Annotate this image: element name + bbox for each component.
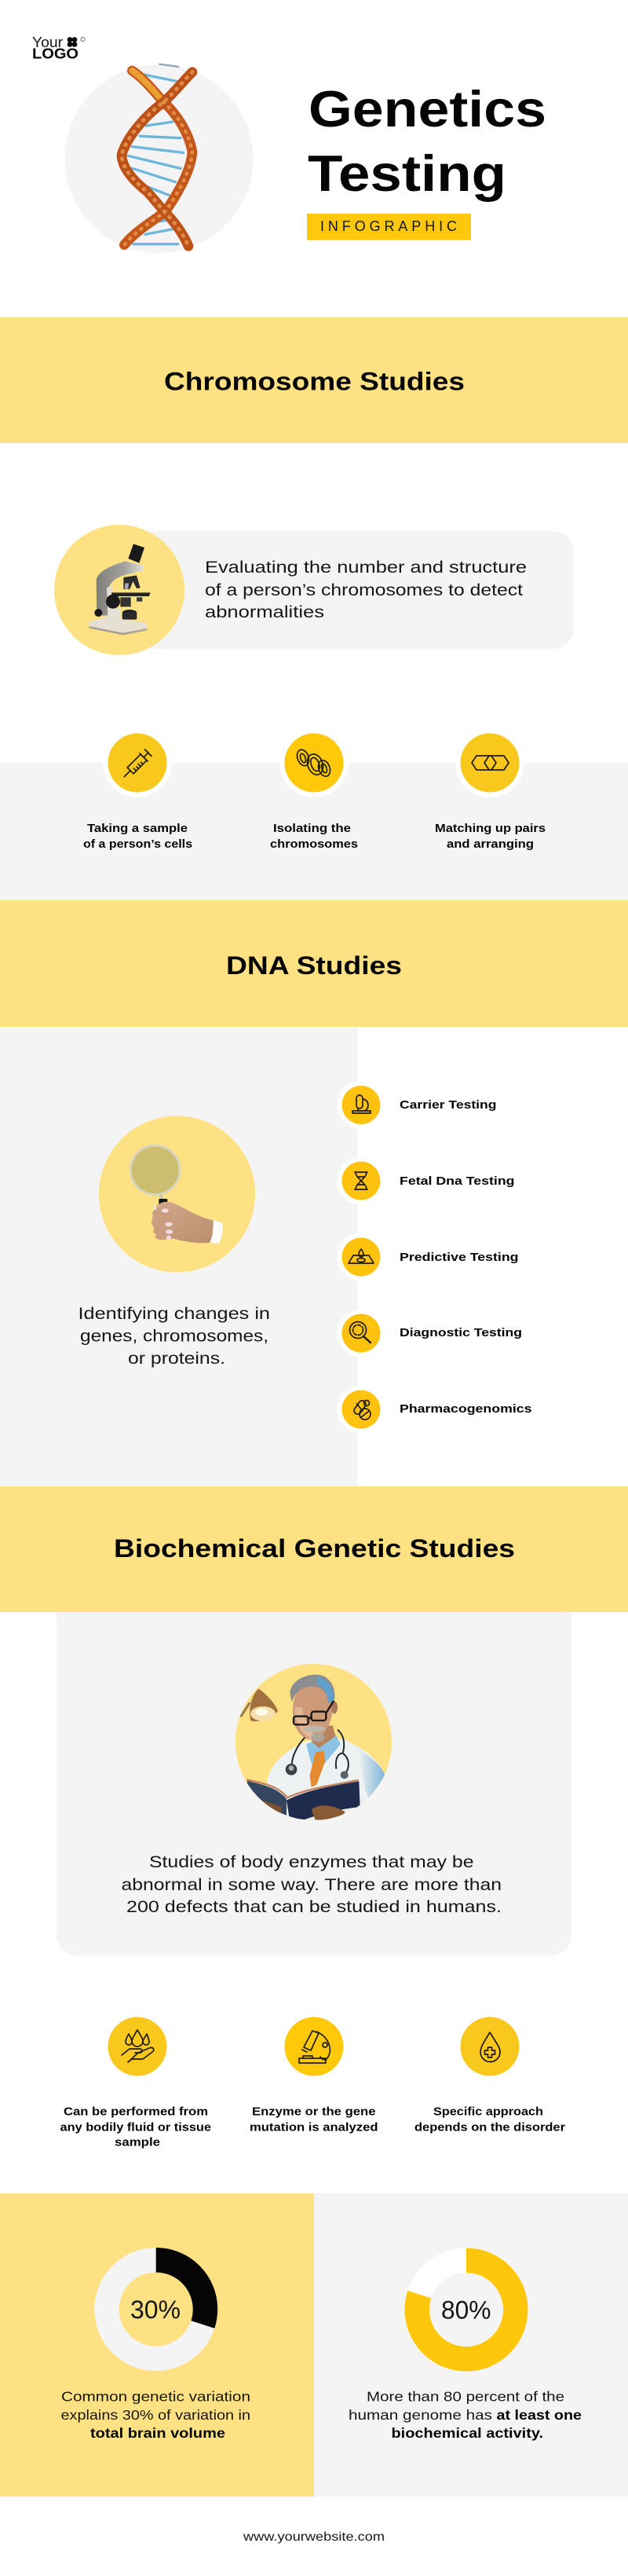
text: biochemical description: Studies of body enzymes that may be: [149, 1852, 474, 1871]
item: carrier testing: Carrier Testing: [400, 1098, 496, 1112]
text: DNA studies description: [78, 1304, 270, 1368]
text: chromosome definition: abnormalities: [205, 603, 324, 621]
item: predictive testing: [338, 1233, 518, 1281]
step: isolating: chromosomes: [270, 837, 358, 851]
feature: fluid sample: Can be performed from: [64, 2105, 208, 2118]
step: matching: Matching up pairs: [435, 822, 546, 835]
title: [308, 80, 546, 202]
text: chromosome definition: of a person’s chromosomes to detect: [205, 581, 523, 599]
title: Genetics: [309, 80, 546, 137]
item: diagnostic testing: [338, 1309, 522, 1358]
text: biochemical activity: biochemical activity.: [391, 2425, 543, 2441]
item: fetal DNA testing: Fetal Dna Testing: [400, 1174, 515, 1188]
step: matching: [435, 728, 546, 851]
list: DNA tests: [338, 1081, 532, 1433]
chart: 80% donut: 80%: [441, 2296, 491, 2324]
panel: DNA studies description: [0, 1027, 358, 1486]
step: isolating: Isolating the: [273, 822, 351, 835]
illustration: doctor reading: [236, 1664, 392, 1820]
step: sample: [83, 728, 192, 851]
item: pharmacogenomics: Pharmacogenomics: [400, 1402, 532, 1416]
section band: Biochemical Genetic Studies: [0, 1486, 628, 1612]
text: chromosome definition: Evaluating the number and structure: [205, 558, 527, 577]
feature: specific approach: depends on the disorder: [414, 2121, 565, 2134]
chart: 80% donut: [417, 2260, 516, 2359]
feature: specific approach: [414, 2017, 565, 2134]
text: brain volume: explains 30% of variation in: [61, 2407, 250, 2423]
item: pharmacogenomics: [338, 1386, 532, 1433]
text: biochemical activity: More than 80 percent of the: [367, 2388, 564, 2404]
step: sample: Taking a sample: [87, 822, 188, 835]
text: brain volume: Common genetic variation: [61, 2388, 250, 2404]
item: carrier testing: [338, 1081, 496, 1129]
text: DNA studies description: Identifying changes in: [78, 1304, 270, 1323]
section band: Chromosome Studies: [0, 317, 628, 443]
text: DNA studies description: genes, chromosomes,: [80, 1326, 268, 1345]
text: chromosome definition: [205, 558, 527, 621]
step: matching: and arranging: [447, 837, 534, 851]
panel: biochemical activity statistic: [314, 2193, 628, 2497]
icon: microscope photo: [89, 544, 151, 635]
feature: fluid sample: [60, 2017, 211, 2149]
subtitle badge: [307, 214, 471, 240]
feature: enzyme analysis: [250, 2017, 378, 2134]
panel: chromosome process steps: [0, 728, 628, 900]
chart: 30% donut: 30%: [130, 2296, 181, 2324]
text: biochemical activity: at least one: [496, 2407, 582, 2423]
item: diagnostic testing: Diagnostic Testing: [400, 1326, 522, 1339]
feature: enzyme analysis: mutation is analyzed: [250, 2121, 378, 2134]
section band: DNA Studies: [0, 900, 628, 1027]
subtitle badge: INFOGRAPHIC: [320, 218, 457, 234]
text: biochemical description: abnormal in some way. There are more than: [121, 1875, 502, 1894]
text: DNA studies description: or proteins.: [128, 1349, 225, 1368]
step: isolating: [270, 728, 358, 851]
item: predictive testing: Predictive Testing: [400, 1251, 518, 1264]
feature: enzyme analysis: Enzyme or the gene: [252, 2105, 375, 2118]
chart: 30% donut: [107, 2260, 205, 2358]
title: Testing: [308, 145, 506, 202]
section band: DNA Studies: DNA Studies: [226, 951, 402, 980]
text: brain volume: [61, 2388, 250, 2441]
logo: Your: [32, 35, 63, 50]
text: biochemical activity: [349, 2388, 582, 2441]
icon: hand holding magnifier: [130, 1145, 223, 1244]
feature: fluid sample: any bodily fluid or tissue: [60, 2121, 211, 2134]
panel: brain volume statistic: [0, 2193, 314, 2497]
logo: LOGO: [32, 46, 78, 61]
panel: chromosome definition: [54, 525, 574, 655]
feature: specific approach: Specific approach: [433, 2105, 543, 2118]
footer website: www.yourwebsite.com: [243, 2530, 385, 2544]
hero illustration: DNA helix: [64, 64, 253, 253]
feature: fluid sample: sample: [115, 2135, 160, 2149]
section band: Biochemical Genetic Studies: Biochemical Genetic Studies: [114, 1534, 515, 1563]
panel: biochemical description: [57, 1612, 571, 1955]
item: fetal DNA testing: [338, 1156, 515, 1205]
text: biochemical description: [121, 1852, 502, 1916]
text: biochemical activity: human genome has: [349, 2407, 492, 2423]
section band: Chromosome Studies: Chromosome Studies: [164, 368, 465, 396]
step: sample: of a person’s cells: [83, 837, 192, 851]
logo: [32, 35, 85, 61]
text: biochemical description: 200 defects that can be studied in humans.: [126, 1897, 502, 1916]
text: brain volume: total brain volume: [90, 2425, 225, 2441]
panel: biochemical features: [60, 2017, 565, 2149]
